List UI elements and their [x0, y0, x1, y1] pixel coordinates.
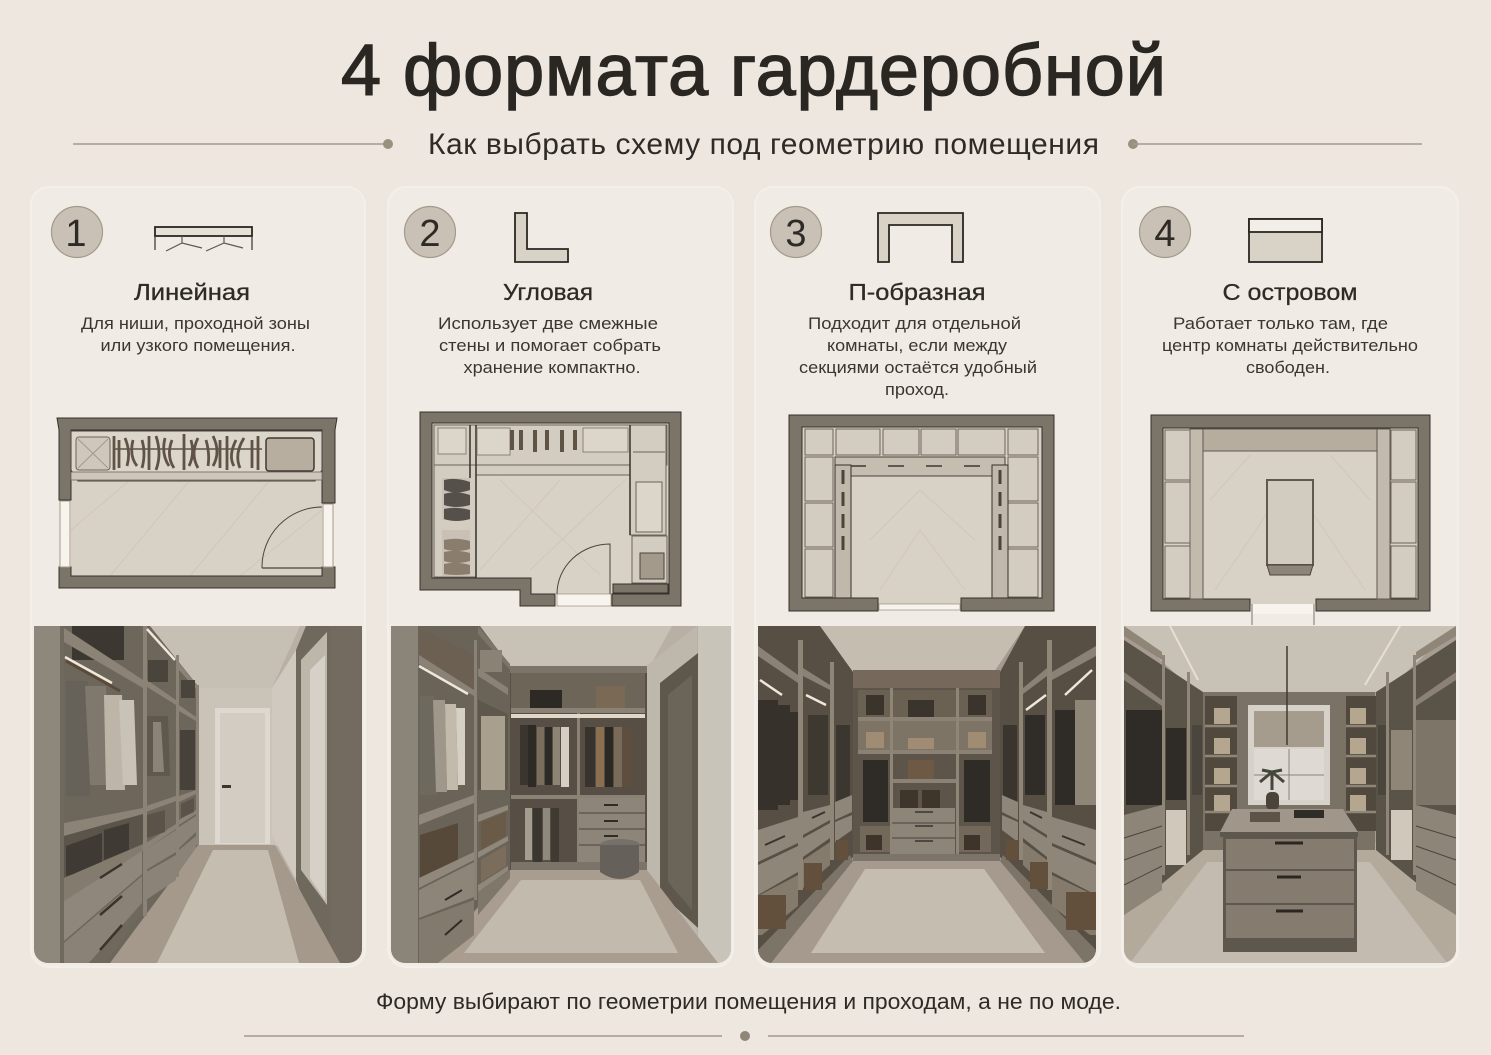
description: центр комнаты действительно	[1162, 336, 1418, 355]
floor plan: corner	[420, 412, 681, 606]
badge 4: 4	[1154, 213, 1176, 255]
badge 3: 3	[785, 213, 807, 255]
badge 1	[52, 206, 102, 258]
heading: П-образная: П-образная	[848, 279, 986, 305]
floor plan: linear	[57, 418, 337, 588]
heading: С островом: С островом	[1222, 279, 1358, 305]
description: проход.	[885, 380, 949, 399]
title: 4 формата гардеробной	[341, 31, 1166, 111]
description	[1162, 314, 1418, 377]
photo: linear wardrobe	[34, 626, 362, 963]
description	[438, 314, 661, 377]
badge 2	[404, 206, 456, 258]
icon: U-shape	[878, 213, 963, 262]
badge 3	[770, 206, 822, 258]
photo: corner wardrobe	[391, 626, 731, 963]
description: Использует две смежные	[438, 314, 658, 333]
badge 1: 1	[65, 213, 87, 255]
icon: linear rail with hangers	[155, 227, 252, 251]
panel: linear wardrobe	[31, 187, 365, 967]
floor plan: island	[1151, 415, 1430, 625]
description: Работает только там, где	[1173, 314, 1388, 333]
badge 4	[1140, 206, 1190, 258]
description	[81, 314, 310, 355]
footer divider	[244, 1031, 1244, 1041]
heading: Угловая: Угловая	[503, 279, 593, 305]
description: хранение компактно.	[464, 358, 640, 377]
badge 2: 2	[419, 213, 441, 255]
subtitle with divider lines	[73, 128, 1422, 161]
description: или узкого помещения.	[100, 336, 296, 355]
icon: room with strip	[1249, 219, 1322, 262]
panel: island wardrobe	[1122, 187, 1458, 967]
subtitle with divider lines: Как выбрать схему под геометрию помещения	[428, 128, 1099, 161]
description	[799, 314, 1037, 399]
panel: corner wardrobe	[388, 187, 733, 967]
icon: L-shape	[515, 213, 568, 262]
description: свободен.	[1246, 358, 1330, 377]
floor plan: U-shape	[789, 415, 1054, 611]
photo: U-shaped wardrobe	[758, 626, 1096, 963]
photo: island wardrobe	[1124, 626, 1456, 963]
description: стены и помогает собрать	[439, 336, 661, 355]
footer note: Форму выбирают по геометрии помещения и проходам, а не по моде.	[376, 989, 1121, 1014]
description: Для ниши, проходной зоны	[81, 314, 310, 333]
description: секциями остаётся удобный	[799, 358, 1037, 377]
description: комнаты, если между	[827, 336, 1008, 355]
heading: Линейная: Линейная	[134, 279, 250, 305]
description: Подходит для отдельной	[808, 314, 1021, 333]
panel: U-shaped wardrobe	[755, 187, 1100, 967]
